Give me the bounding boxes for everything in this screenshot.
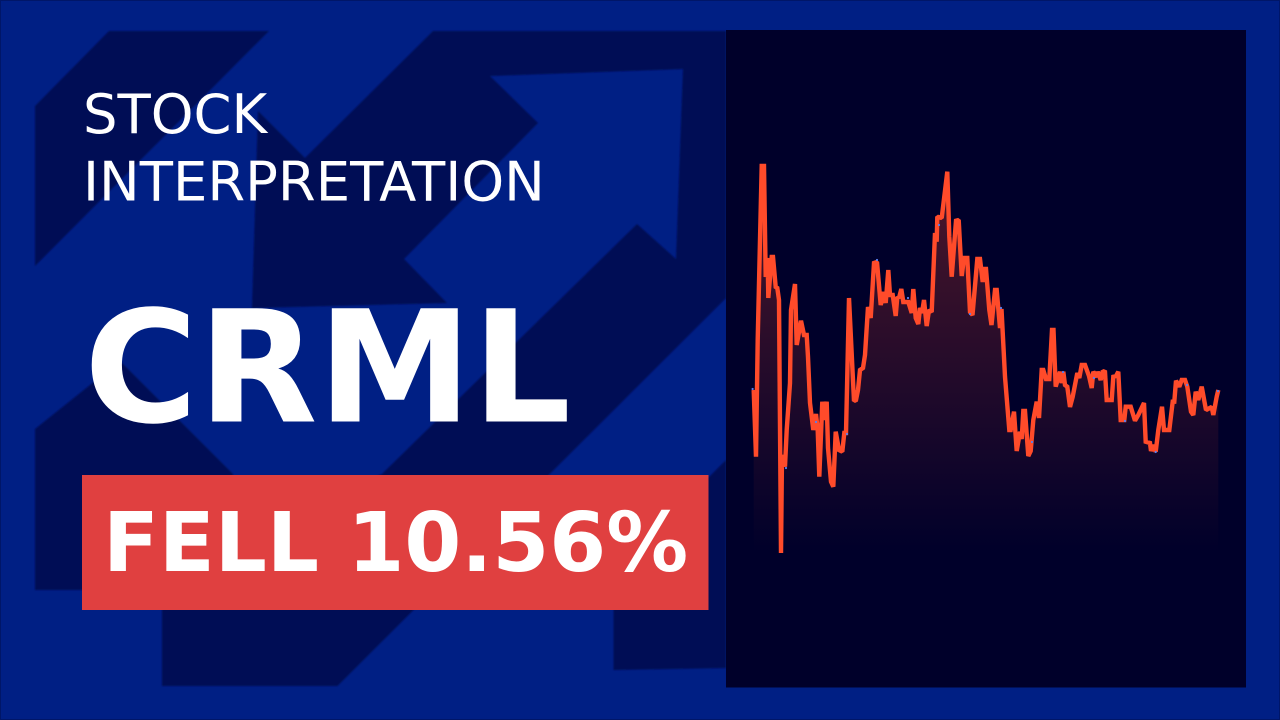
callout: fell 10.56%: FELL 10.56%	[103, 496, 688, 591]
title: stock interpretation: STOCK	[83, 83, 269, 146]
panel: price chart	[726, 30, 1246, 688]
chart price line	[754, 166, 1218, 553]
title: stock interpretation: INTERPRETATION	[83, 150, 545, 214]
chart sample markers	[752, 224, 1219, 469]
chart area fill	[754, 166, 1218, 553]
background arrow pattern	[35, 31, 726, 686]
callout: fell 10.56%	[82, 475, 708, 610]
ticker: CRML: CRML	[84, 278, 571, 458]
title: stock interpretation	[83, 83, 545, 214]
